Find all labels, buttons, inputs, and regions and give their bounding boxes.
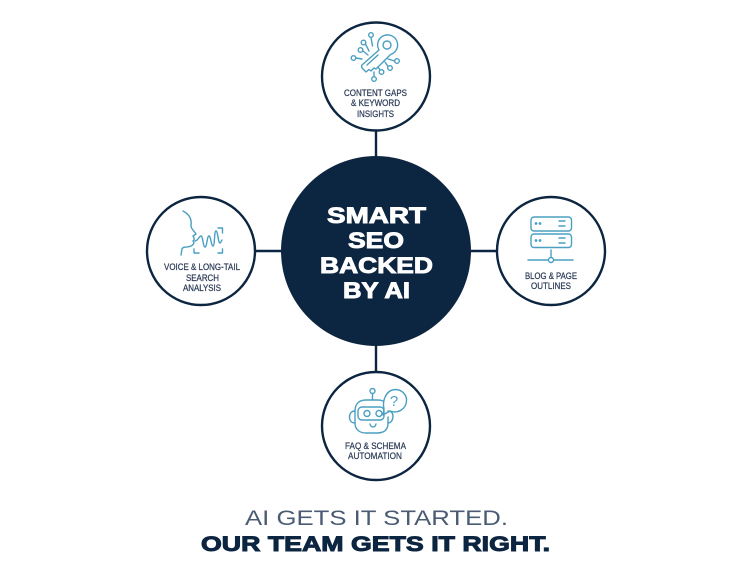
label: OUTLINES: [531, 281, 571, 292]
label: INSIGHTS: [357, 109, 394, 120]
hub title: SEO: [348, 228, 404, 253]
label: & KEYWORD: [351, 98, 400, 109]
hub title: BY AI: [343, 278, 410, 303]
hub title: [320, 203, 433, 303]
central hub: [281, 156, 471, 346]
hub title: SMART: [327, 203, 427, 228]
label: BLOG & PAGE: [525, 271, 577, 282]
label: VOICE & LONG-TAIL: [164, 262, 240, 273]
label: AUTOMATION: [348, 451, 402, 462]
label: [344, 88, 407, 120]
panel: outlines: [497, 197, 605, 305]
tagline: [201, 506, 550, 556]
icon: question mark: ?: [390, 393, 398, 410]
label: [525, 271, 577, 292]
label: [164, 262, 240, 294]
tagline: OUR TEAM GETS IT RIGHT.: [201, 532, 550, 556]
panel: voice search: [147, 197, 255, 305]
hub title: BACKED: [320, 253, 433, 278]
panel: FAQ: [322, 372, 430, 480]
label: [345, 441, 407, 462]
tagline: AI GETS IT STARTED.: [245, 506, 508, 530]
label: CONTENT GAPS: [344, 88, 407, 99]
label: FAQ & SCHEMA: [345, 441, 407, 452]
connectors: [254, 130, 498, 372]
label: ANALYSIS: [183, 283, 221, 294]
icon: key: [351, 33, 399, 81]
label: SEARCH: [186, 273, 219, 284]
panel: content gaps: [322, 22, 430, 130]
icon: server: [528, 217, 573, 262]
icon: voice profile: [181, 211, 222, 255]
